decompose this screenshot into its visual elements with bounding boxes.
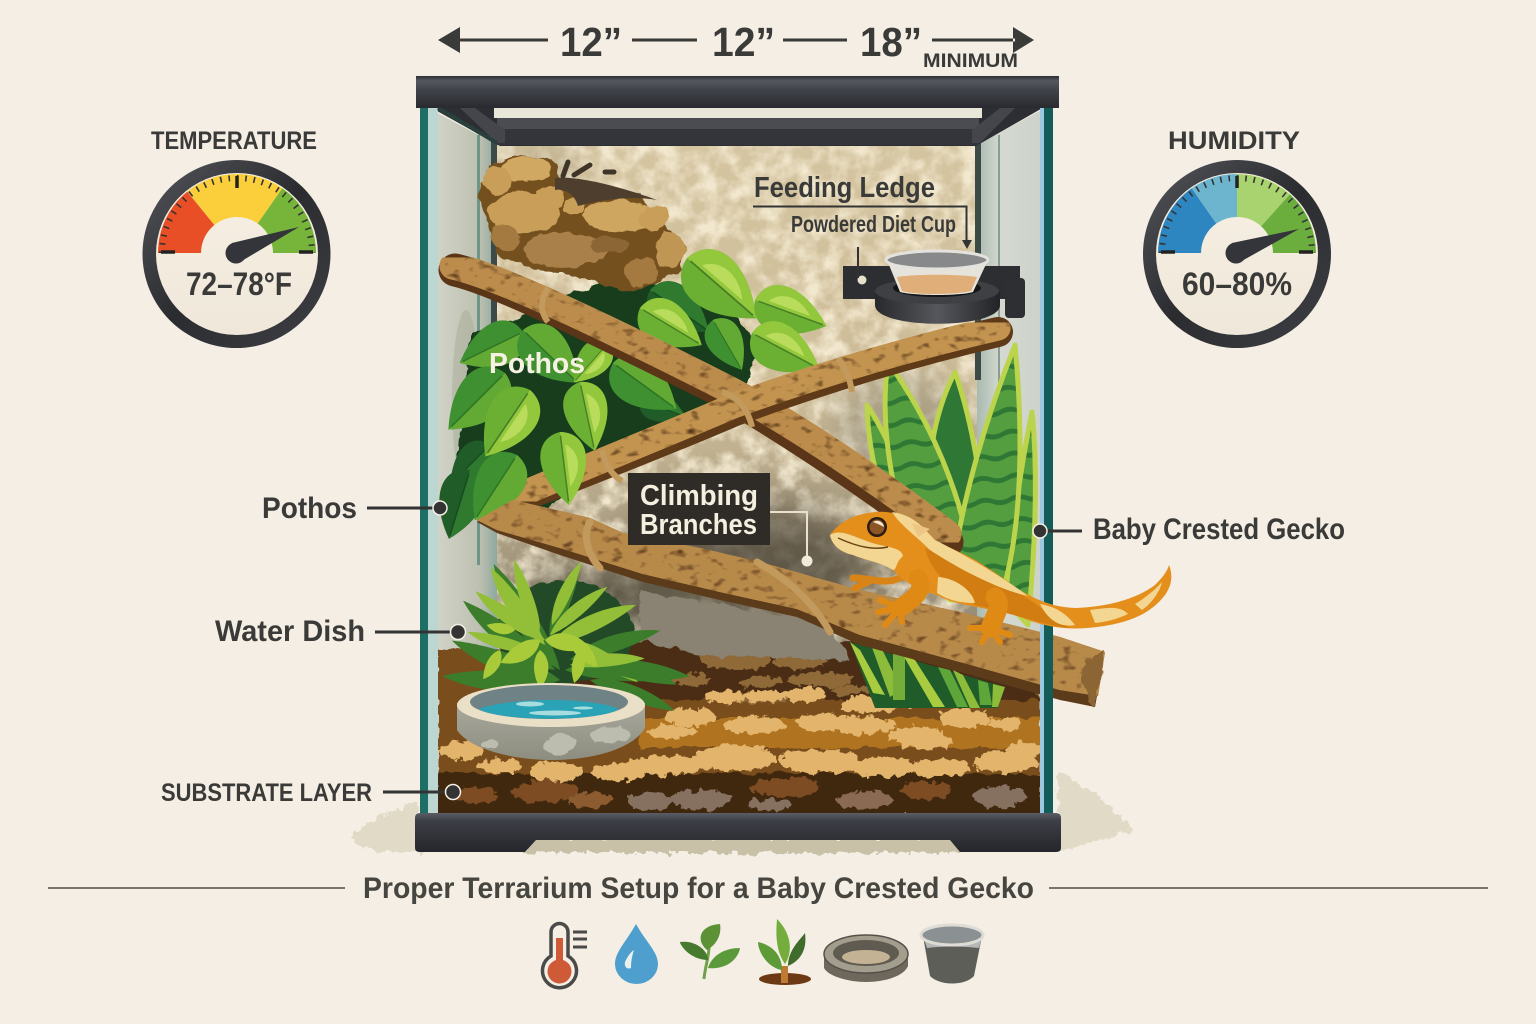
climbing branch middle — [517, 328, 998, 499]
back stone under log — [640, 590, 850, 660]
terrarium — [415, 76, 1171, 852]
back soil — [497, 641, 1040, 700]
temperature reading: 72–78°F — [186, 266, 292, 302]
label text line one: Climbing — [640, 480, 758, 512]
branch top — [517, 328, 998, 496]
branch top — [453, 266, 948, 534]
callout dot — [433, 501, 447, 515]
terrarium base — [415, 813, 1061, 852]
left glass pane — [428, 108, 497, 815]
holder ring — [875, 283, 1000, 324]
gauge face — [1156, 173, 1318, 335]
substrate layer — [438, 641, 1043, 815]
bright bark flakes — [440, 688, 1043, 782]
pothos front leaves — [428, 429, 592, 545]
fern fronds — [442, 668, 560, 693]
leader arrow to cup — [753, 206, 966, 243]
lower shoots — [850, 642, 1005, 708]
humidity heading: HUMIDITY — [1168, 127, 1300, 155]
gecko body and tail — [830, 512, 1171, 628]
needle hub — [1226, 242, 1246, 264]
gauge ticks — [162, 178, 312, 253]
callout line — [375, 630, 458, 634]
gecko far front leg — [853, 578, 900, 588]
right glass pane — [977, 108, 1045, 815]
front log — [477, 500, 1105, 707]
callout: pothos — [262, 492, 447, 525]
pothos left leaves behind branches — [431, 312, 691, 497]
orange mid band — [640, 718, 1040, 748]
gauge bezel — [142, 160, 330, 348]
dimension 18 inches height: 18” — [860, 19, 922, 65]
icon: water drop — [615, 924, 658, 984]
water — [479, 700, 619, 719]
mounting hole — [858, 276, 866, 284]
log top — [477, 500, 1105, 696]
callout text: Baby Crested Gecko — [1093, 513, 1345, 546]
gecko eye — [867, 517, 887, 537]
caption rule right — [1049, 887, 1488, 889]
fern dark backdrop — [497, 580, 633, 684]
dark front soil — [438, 772, 1040, 815]
dish body — [457, 703, 645, 760]
dimension 12 inches width: 12” — [712, 19, 775, 65]
gauge needle — [1232, 229, 1299, 262]
climbing branch upper — [453, 266, 948, 542]
cup — [887, 260, 988, 295]
arrow: left dimension — [438, 27, 548, 53]
water dish — [457, 683, 645, 760]
branch underside — [455, 270, 947, 542]
gecko crest ear — [912, 523, 930, 537]
divider line — [632, 38, 697, 42]
humidity reading: 60–80% — [1182, 266, 1292, 302]
callout line — [383, 790, 453, 794]
gauge face — [156, 173, 318, 335]
callout: water dish — [215, 615, 466, 648]
moss sprigs — [563, 162, 614, 176]
terrarium lid — [416, 76, 1059, 108]
minimum note: MINIMUM — [923, 51, 1018, 72]
icon: cup — [921, 925, 983, 984]
callout text: Pothos — [262, 492, 357, 525]
major ticks — [1161, 176, 1313, 252]
gecko — [830, 512, 1171, 642]
rock hide — [478, 155, 685, 291]
icon row — [542, 919, 983, 988]
callout: baby crested gecko — [1033, 513, 1345, 546]
dark foliage mass — [450, 275, 760, 515]
divider line — [783, 38, 847, 42]
panel: temperature gauge — [142, 127, 330, 348]
left pane reflection — [452, 310, 480, 490]
major ticks — [161, 176, 313, 252]
label text line two: Branches — [640, 509, 757, 541]
snake plant blades — [867, 345, 1035, 625]
icon: dish — [824, 935, 908, 982]
lid underside frame — [428, 106, 1046, 146]
gecko mouth — [838, 538, 888, 548]
wall shadow patches — [505, 150, 965, 650]
leader — [770, 512, 807, 558]
callout dot — [446, 784, 460, 800]
log vine ties — [586, 522, 830, 632]
gecko darker flank — [925, 548, 1070, 628]
log underside — [477, 500, 1105, 707]
back bark flakes — [670, 650, 870, 703]
fern — [442, 558, 691, 716]
callout line — [1040, 530, 1082, 532]
light green zone — [1237, 174, 1290, 226]
gauge ticks — [1162, 178, 1312, 253]
label: feeding ledge — [753, 172, 972, 249]
powdered diet cup text: Powdered Diet Cup — [791, 211, 956, 237]
dish rim — [457, 683, 645, 727]
branch underside — [517, 332, 998, 499]
callout text: SUBSTRATE LAYER — [161, 779, 372, 807]
moss band — [555, 178, 657, 206]
pothos back foliage — [450, 236, 834, 515]
upper right leaves — [637, 272, 722, 350]
icon: leaf sprig — [680, 924, 740, 979]
icon: thermometer — [542, 924, 587, 988]
ground smudge shadows — [350, 770, 1135, 853]
callout dot — [450, 624, 466, 640]
gecko cream markings — [830, 512, 1162, 626]
arrow head — [962, 240, 972, 249]
feeding ledge — [843, 247, 1025, 324]
gauge bezel — [1143, 160, 1331, 348]
needle hub — [226, 242, 246, 264]
brown soil clumps — [453, 778, 1026, 811]
water ripples — [516, 702, 593, 716]
cup rim — [886, 251, 988, 269]
soil base — [438, 650, 1040, 815]
arrow: right dimension — [932, 27, 1034, 53]
caption text: Proper Terrarium Setup for a Baby Crested Gecko — [363, 872, 1034, 905]
callout text: Water Dish — [215, 615, 365, 648]
blue zone — [1158, 188, 1216, 253]
gecko rear leg — [970, 597, 1010, 642]
back wall — [495, 143, 980, 653]
label plate — [628, 473, 770, 545]
snake plant — [850, 345, 1035, 708]
diet powder — [897, 275, 977, 294]
front glass edges — [420, 108, 1053, 813]
log end cap — [1082, 650, 1105, 707]
rock facets — [483, 157, 685, 286]
back plate — [843, 266, 1020, 299]
glass corner posts — [477, 135, 1000, 565]
dimension 12 inches depth: 12” — [560, 19, 622, 65]
stone shading — [482, 727, 630, 755]
label: pothos on foliage: Pothos — [489, 348, 585, 380]
leader dot — [802, 556, 812, 566]
green zone — [1261, 194, 1316, 253]
callout dot — [1033, 524, 1047, 538]
green zone — [258, 188, 316, 253]
light blue zone — [1192, 174, 1237, 224]
temperature heading: TEMPERATURE — [151, 127, 317, 155]
red zone — [158, 192, 214, 253]
gecko front leg — [878, 578, 920, 625]
rock mass — [478, 155, 685, 291]
side clamp — [1005, 278, 1025, 318]
yellow zone — [187, 174, 282, 225]
callout: substrate layer — [161, 779, 460, 807]
mounting wire — [857, 247, 859, 278]
dimension header — [438, 19, 1034, 72]
feeding ledge title: Feeding Ledge — [754, 172, 935, 204]
branch ties — [542, 288, 852, 481]
icon: potted plant sprout — [758, 919, 811, 985]
label: climbing branches — [628, 473, 812, 566]
caption rule left — [48, 887, 345, 889]
gauge needle — [232, 227, 299, 262]
dish interior — [470, 685, 628, 719]
callout line — [367, 506, 440, 510]
panel: humidity gauge — [1143, 127, 1331, 348]
